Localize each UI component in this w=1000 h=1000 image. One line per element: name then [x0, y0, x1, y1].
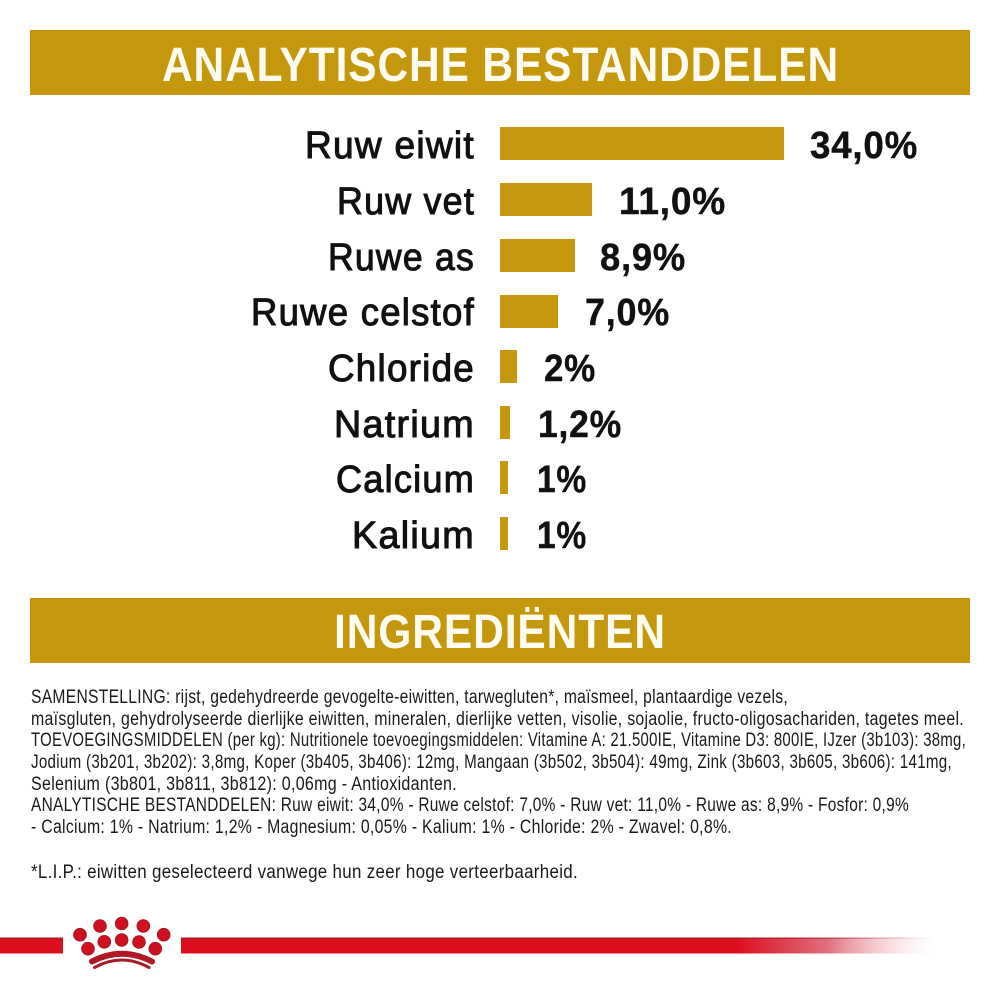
row: Ruw vet: 11,0% [619, 181, 726, 223]
row: Kalium: 1% [537, 515, 587, 557]
row: Ruwe as [328, 237, 686, 279]
footer red line, left [0, 938, 63, 954]
row: Ruwe celstof [251, 292, 670, 334]
row: Chloride [328, 348, 596, 390]
row: Ruw eiwit: Ruw eiwit [305, 125, 475, 167]
row: Natrium: 1,2% [538, 404, 622, 446]
row: Ruw vet: Ruw vet [337, 181, 475, 223]
row: Ruwe celstof: 7,0% [585, 292, 670, 334]
row: Calcium [336, 459, 587, 501]
row: Calcium: Calcium [336, 459, 475, 501]
bar chart: analytical components [251, 125, 918, 557]
row: Chloride: Chloride [328, 348, 475, 390]
heading banner: analytische bestanddelen: ANALYTISCHE BESTANDDELEN [162, 39, 839, 92]
heading banner: ingredienten [30, 598, 970, 663]
footer red line, right with fade [181, 938, 933, 954]
row: Ruw eiwit: 34,0% [810, 125, 918, 167]
ingredients text block: Selenium (3b801, 3b811, 3b812): 0,06mg - Antioxidanten. [31, 774, 457, 795]
row: Natrium [334, 404, 622, 446]
row: Ruw vet [337, 181, 726, 223]
row: Ruw eiwit [305, 125, 918, 167]
row: Ruwe as: 8,9% [600, 237, 686, 279]
row: Chloride: 2% [544, 348, 596, 390]
icon: royal crown logo [74, 917, 170, 968]
row: Kalium [352, 515, 587, 557]
ingredients text block [31, 687, 966, 883]
ingredients text block: *L.I.P.: eiwitten geselecteerd vanwege hun zeer hoge verteerbaarheid. [31, 862, 578, 883]
heading banner: analytische bestanddelen [30, 30, 970, 95]
ingredients text block: - Calcium: 1% - Natrium: 1,2% - Magnesium: 0,05% - Kalium: 1% - Chloride: 2% - Zwavel: 0,8%. [31, 817, 732, 838]
row: Kalium: Kalium [352, 515, 475, 557]
ingredients text block: SAMENSTELLING: rijst, gedehydreerde gevogelte-eiwitten, tarwegluten*, maïsmeel, plantaardige vezels, [31, 687, 788, 708]
row: Calcium: 1% [537, 459, 587, 501]
row: Natrium: Natrium [334, 404, 475, 446]
row: Ruwe celstof: Ruwe celstof [251, 292, 475, 334]
heading banner: ingredienten: INGREDIËNTEN [334, 606, 666, 659]
row: Ruwe as: Ruwe as [328, 237, 475, 279]
